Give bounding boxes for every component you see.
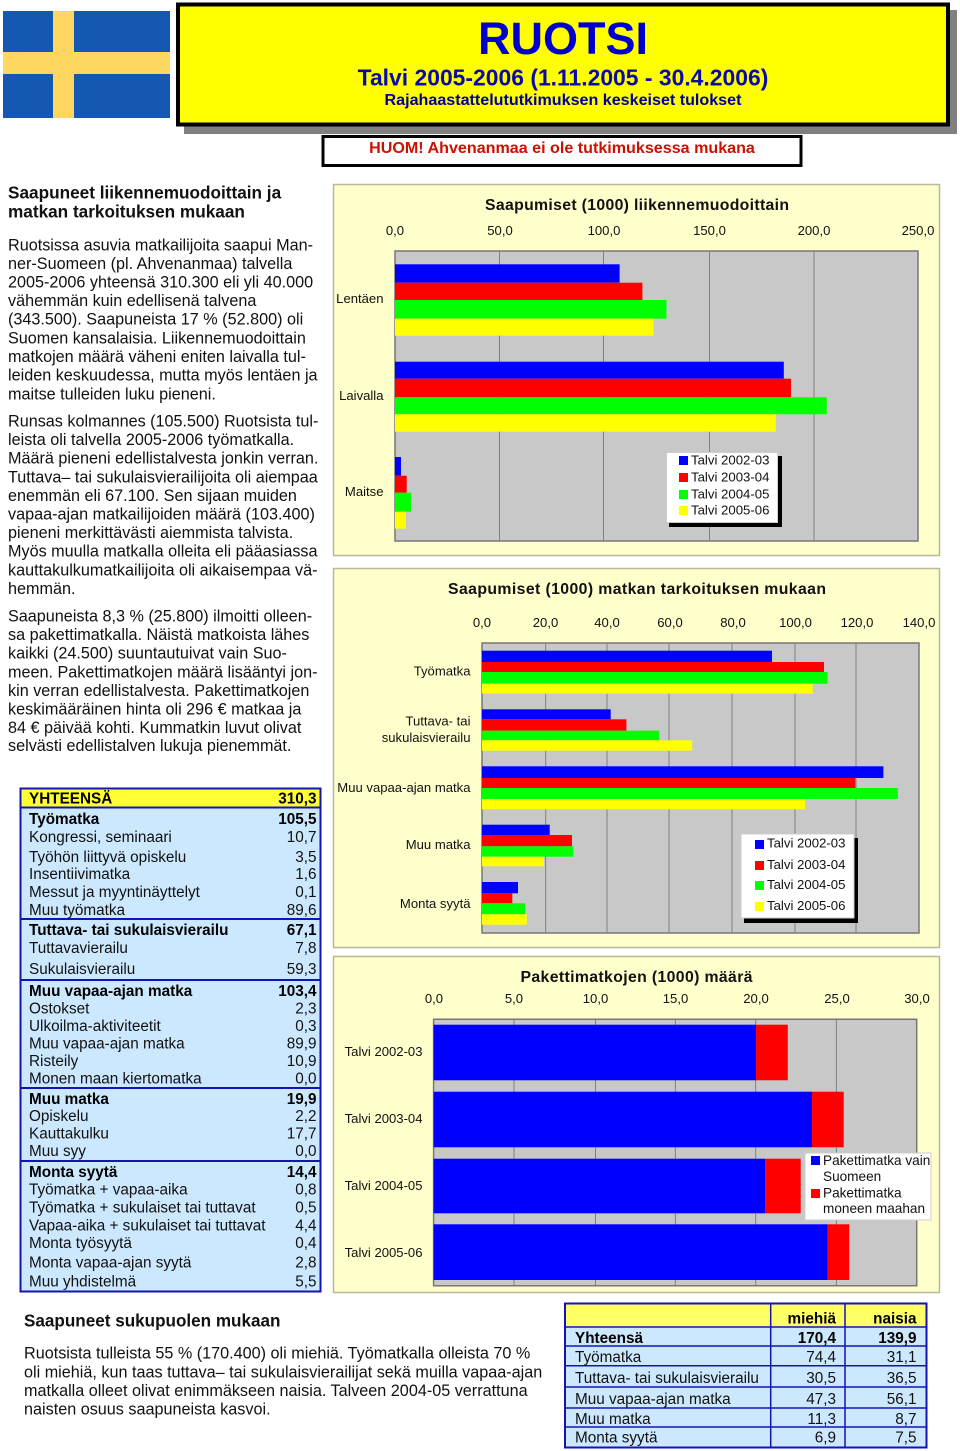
rows: Muu vapaa-ajan matka: 0,0 (295, 1070, 316, 1088)
panel: chart package tours (334, 956, 940, 1292)
legend: Pakettimatka vain (823, 1153, 930, 1168)
axis labels: 0,0 (425, 991, 443, 1006)
bars: Talvi 2005-06 (434, 1224, 849, 1280)
rows: totals (575, 1330, 916, 1347)
rows: YHTEENSÄ: YHTEENSÄ (29, 790, 112, 808)
text block: main article: leiden keskuudessa, mutta myös lentäen ja (8, 366, 318, 384)
legend: Talvi 2003-04 (691, 470, 769, 484)
rows: purposes (575, 1349, 916, 1446)
rows: purposes: 31,1 (887, 1349, 916, 1366)
rows: Muu matka: 19,9 (287, 1091, 316, 1108)
rows: Työmatka: 89,6 (287, 902, 316, 919)
header row (788, 1310, 917, 1328)
category labels (345, 1044, 422, 1260)
legend: Talvi 2004-05 (767, 877, 845, 892)
legend (666, 452, 782, 527)
rows: totals: 170,4 (798, 1330, 836, 1347)
rows: Työmatka: 1,6 (295, 866, 316, 883)
rows: Muu matka (29, 1091, 316, 1160)
rows: Työmatka: 0,1 (295, 884, 316, 901)
axis labels: 25,0 (824, 991, 850, 1006)
axis labels: 100,0 (779, 615, 812, 630)
text block: main article: (343.500). Saapuneista 17 % (52.800) oli (8, 310, 303, 328)
rows: Muu vapaa-ajan matka: 0,3 (295, 1018, 316, 1035)
text block: main article: maitse tulleiden luku pieneni. (8, 386, 216, 404)
rows: Työmatka: 3,5 (295, 849, 316, 866)
text block: gender article: naisten osuus saapuneista kasvoi. (24, 1400, 271, 1418)
axis labels (425, 991, 930, 1006)
rows: Muu vapaa-ajan matka: 2,3 (295, 1000, 316, 1018)
axis labels: 30,0 (904, 991, 930, 1006)
rows: Muu vapaa-ajan matka: Ostokset (29, 1000, 90, 1018)
bars: Tuttava- tai sukulaisvierailu (482, 709, 692, 751)
text block: main article: kin verran edellistalvesta. Pakettimatkojen (8, 682, 309, 700)
plot area (434, 1019, 917, 1286)
rows: Monta syytä: 0,5 (295, 1200, 316, 1216)
table: arrivals by purpose (20, 788, 321, 1292)
text block: main article: hemmän. (8, 580, 75, 598)
rows: purposes: 8,7 (895, 1411, 916, 1428)
rows: purposes: Muu vapaa-ajan matka (575, 1391, 731, 1408)
text block: main article: Myös muulla matkalla olleita eli pääasiassa (8, 542, 318, 560)
category labels: sukulaisvierailu (382, 730, 470, 745)
bars: Muu matka (482, 825, 573, 866)
legend: Talvi 2003-04 (767, 857, 845, 872)
text block: main article (8, 236, 318, 755)
rows: Monta syytä: Monta vapaa-ajan syytä (29, 1254, 192, 1272)
axis labels (386, 223, 934, 238)
rows: Monta syytä: Monta työsyytä (29, 1235, 132, 1252)
rows: totals: 139,9 (878, 1330, 916, 1347)
table: arrivals by gender (565, 1303, 927, 1448)
category labels: Talvi 2003-04 (345, 1111, 422, 1126)
rows: Monta syytä: 14,4 (287, 1164, 317, 1181)
rows: Monta syytä: 2,8 (295, 1254, 316, 1272)
rows: Muu matka: Muu matka (29, 1091, 109, 1108)
text block: gender article: matkalla olleet olivat enimmäkseen naisia. Talveen 2004-05 verrattuna (24, 1382, 528, 1400)
rows: Monta syytä: 5,5 (295, 1274, 316, 1290)
category labels: Laivalla (339, 388, 384, 403)
axis labels: 50,0 (487, 223, 513, 238)
rows: Tuttava- tai sukulaisvierailu: 59,3 (287, 961, 316, 978)
text block: main article: kauttakulkumatkailijoita oli aikaisempaa vä- (8, 562, 318, 580)
rows: Monta syytä: Muu yhdistelmä (29, 1274, 137, 1290)
bars: Lentäen (395, 264, 666, 336)
text block: gender article: Ruotsista tulleista 55 % (170.400) oli miehiä. Työmatkalla olleista 70 % (24, 1344, 530, 1362)
title: RUOTSI (478, 13, 648, 64)
axis labels: 120,0 (841, 615, 873, 630)
rows: Monta syytä: Monta syytä (29, 1164, 118, 1181)
rows: Muu vapaa-ajan matka: Ulkoilma-aktiviteetit (29, 1018, 162, 1035)
panel: chart arrivals by transport (334, 184, 940, 556)
axis labels: 40,0 (594, 615, 620, 630)
rows: purposes: Tuttava- tai sukulaisvierailu (575, 1370, 759, 1387)
rows: Tuttava- tai sukulaisvierailu (29, 922, 317, 978)
rows: purposes: Monta syytä (575, 1430, 658, 1446)
rows: Monta syytä: Työmatka + vapaa-aika (29, 1182, 188, 1198)
text block: main article: leista oli talvella 2005-2006 työmatkalla. (8, 431, 294, 449)
rows: Muu vapaa-ajan matka: Muu vapaa-ajan matka (29, 1036, 185, 1052)
text block: main article: Runsas kolmannes (105.500) Ruotsista tul- (8, 412, 318, 430)
icon: Swedish flag (3, 11, 170, 118)
text block: main article: enemmän eli 67.100. Sen sijaan muiden (8, 487, 297, 505)
chart title: Saapumiset (1000) liikennemuodoittain (485, 197, 789, 214)
heading: arrivals by transport and purpose (8, 182, 282, 222)
rows: Muu vapaa-ajan matka: 89,9 (287, 1036, 316, 1052)
note box: HUOM! Ahvenanmaa ei ole tutkimuksessa mukana (369, 139, 756, 157)
text block: main article: selvästi edellistalven lukuja pienemmät. (8, 737, 291, 755)
rows: Muu vapaa-ajan matka: 103,4 (278, 983, 317, 1000)
rows: Työmatka: Työmatka (29, 811, 100, 828)
chart title: Pakettimatkojen (1000) määrä (520, 969, 753, 986)
axis labels: 0,0 (473, 615, 491, 630)
rows: Muu matka: 2,2 (295, 1108, 316, 1125)
category labels: Talvi 2005-06 (345, 1245, 422, 1260)
rows: YHTEENSÄ (29, 790, 316, 808)
legend: Talvi 2004-05 (691, 486, 769, 502)
axis labels: 250,0 (902, 223, 934, 238)
text block: main article: ner-Suomeen (pl. Ahvenanmaa) talvella (8, 255, 292, 273)
legend: Pakettimatka (823, 1186, 902, 1200)
text block: main article: keskimääräinen hinta oli 296 € matkaa ja (8, 700, 301, 718)
text block: main article: vapaa-ajan matkailijoiden määrä (103.400) (8, 506, 315, 524)
category labels: Lentäen (336, 291, 384, 306)
rows: Monta syytä (29, 1164, 317, 1290)
heading: arrivals by transport and purpose: matkan tarkoituksen mukaan (8, 202, 245, 222)
rows: Monta syytä: 0,4 (295, 1235, 317, 1252)
rows: Monta syytä: 4,4 (295, 1218, 317, 1234)
heading: arrivals by transport and purpose: Saapuneet liikennemuodoittain ja (8, 182, 282, 202)
rows: Muu vapaa-ajan matka: Muu vapaa-ajan matka (29, 983, 193, 1000)
rows: Tuttava- tai sukulaisvierailu: Sukulaisvierailu (29, 961, 135, 978)
rows: Muu vapaa-ajan matka (29, 983, 317, 1088)
axis labels: 10,0 (583, 991, 608, 1006)
text block: main article: meen. Pakettimatkojen määrä lisääntyi jon- (8, 664, 318, 682)
bars: Muu vapaa-ajan matka (482, 766, 898, 809)
axis labels: 150,0 (693, 223, 726, 238)
rows: purposes: 47,3 (806, 1391, 836, 1408)
plot area (395, 251, 918, 541)
rows: Tuttava- tai sukulaisvierailu: 67,1 (287, 922, 317, 939)
rows: YHTEENSÄ: 310,3 (278, 790, 316, 808)
rows: Monta syytä: 0,8 (295, 1182, 316, 1198)
legend: Suomeen (823, 1169, 881, 1184)
rows: purposes: 7,5 (895, 1430, 916, 1446)
text block: main article: Ruotsissa asuvia matkailijoita saapui Man- (8, 236, 313, 254)
panel: chart arrivals by purpose (334, 568, 940, 948)
rows: purposes: 56,1 (887, 1391, 916, 1408)
text block: gender article: oli miehiä, kun taas tuttava– tai sukulaisvierailijat sekä muilla vapaa-ajan (24, 1364, 542, 1382)
text block: main article: matkojen määrä väheni eniten laivalla tul- (8, 348, 306, 366)
axis labels: 0,0 (386, 223, 404, 238)
bars: Talvi 2003-04 (434, 1092, 844, 1147)
rows: Työmatka: Insentiivimatka (29, 866, 131, 883)
axis labels: 60,0 (657, 615, 683, 630)
text block: main article: Tuttava– tai sukulaisvierailijoita oli aiempaa (8, 468, 318, 486)
category labels: Tuttava- tai (405, 714, 471, 728)
text block: main article: Saapuneista 8,3 % (25.800) ilmoitti olleen- (8, 608, 312, 626)
rows: Muu vapaa-ajan matka: 10,9 (287, 1053, 316, 1070)
text block: main article: kaikki (24.500) suuntautuivat vain Suo- (8, 644, 287, 662)
rows: Muu matka: 17,7 (287, 1126, 316, 1142)
axis labels: 15,0 (663, 991, 688, 1006)
text block: gender article (24, 1344, 542, 1418)
axis labels: 20,0 (743, 991, 769, 1006)
category labels: Muu matka (406, 837, 471, 852)
bars: Talvi 2004-05 (434, 1159, 801, 1213)
rows: Tuttava- tai sukulaisvierailu: Tuttavavierailu (29, 940, 128, 957)
rows: Monta syytä: Vapaa-aika + sukulaiset tai tuttavat (29, 1218, 266, 1234)
rows: purposes: 6,9 (815, 1430, 836, 1446)
category labels: Talvi 2004-05 (345, 1178, 422, 1193)
subtitle: period: Talvi 2005-2006 (1.11.2005 - 30.4.2006) (358, 64, 768, 90)
axis labels (473, 615, 935, 630)
bars: Laivalla (395, 362, 827, 432)
text block: main article: sa pakettimatkalla. Näistä matkoista lähes (8, 626, 309, 644)
axis labels: 200,0 (798, 223, 830, 238)
chart title: Saapumiset (1000) matkan tarkoituksen mukaan (448, 581, 826, 598)
rows: Työmatka (29, 811, 317, 919)
rows: Työmatka: Muu työmatka (29, 902, 126, 919)
bars: Maitse (395, 457, 411, 529)
subtitle: survey: Rajahaastattelututkimuksen keskeiset tulokset (385, 91, 742, 109)
rows: Muu vapaa-ajan matka: Risteily (29, 1053, 79, 1070)
rows: Työmatka: Työhön liittyvä opiskelu (29, 849, 186, 866)
bars: Monta syytä (482, 882, 527, 925)
bars: Työmatka (482, 651, 828, 694)
axis labels: 80,0 (720, 615, 746, 630)
rows: purposes: Työmatka (575, 1349, 642, 1366)
legend: moneen maahan (823, 1201, 925, 1216)
rows: Työmatka: 105,5 (278, 811, 317, 828)
rows: totals: Yhteensä (575, 1330, 644, 1347)
rows: Monta syytä: Työmatka + sukulaiset tai tuttavat (29, 1200, 256, 1216)
text block: main article: 84 € päivää kohti. Kummatkin luvut olivat (8, 719, 302, 737)
category labels: Muu vapaa-ajan matka (337, 780, 471, 795)
axis labels: 140,0 (903, 615, 935, 630)
title banner (178, 4, 957, 134)
category labels (336, 291, 384, 499)
legend: Talvi 2005-06 (691, 502, 769, 518)
heading: arrivals by gender: Saapuneet sukupuolen mukaan (24, 1312, 280, 1330)
bars: Talvi 2002-03 (434, 1025, 788, 1080)
rows: purposes: Muu matka (575, 1411, 651, 1428)
rows: Tuttava- tai sukulaisvierailu: Tuttava- tai sukulaisvierailu (29, 922, 228, 939)
category labels: Monta syytä (400, 896, 471, 911)
legend: Talvi 2002-03 (691, 452, 769, 468)
rows: purposes: 74,4 (806, 1349, 836, 1366)
text block: main article: 2005-2006 yhteensä 310.300 eli yli 40.000 (8, 274, 313, 292)
rows: Työmatka: 10,7 (287, 829, 316, 846)
legend (741, 834, 858, 923)
rows: Muu matka: Muu syy (29, 1143, 86, 1160)
rows: purposes: 36,5 (887, 1370, 916, 1387)
rows: Muu matka: 0,0 (295, 1143, 316, 1160)
rows: Työmatka: Messut ja myyntinäyttelyt (29, 884, 201, 901)
note box (323, 136, 801, 166)
rows: purposes: 11,3 (807, 1411, 836, 1428)
axis labels: 20,0 (533, 615, 558, 630)
rows: Muu vapaa-ajan matka: Monen maan kiertomatka (29, 1070, 202, 1088)
axis labels: 100,0 (588, 223, 620, 238)
rows: purposes: 30,5 (806, 1370, 836, 1387)
rows: Muu matka: Opiskelu (29, 1108, 89, 1125)
category labels: Maitse (345, 484, 384, 499)
text block: main article: pieneni merkittävästi aiemmista talvista. (8, 524, 293, 542)
text block: main article: Suomen kansalaisia. Liikennemuodoittain (8, 330, 306, 348)
text block: main article: vähemmän kuin edellisenä talvena (8, 292, 256, 310)
header row: naisia (873, 1310, 917, 1328)
category labels (337, 664, 471, 911)
legend: Talvi 2005-06 (767, 898, 845, 913)
legend (805, 1153, 931, 1220)
legend: Talvi 2002-03 (767, 836, 845, 850)
header row: miehiä (788, 1310, 836, 1328)
rows: Muu matka: Kauttakulku (29, 1126, 109, 1142)
plot area (482, 643, 919, 933)
rows: Työmatka: Kongressi, seminaari (29, 829, 172, 846)
text block: main article: Määrä pieneni edellistalvesta jonkin verran. (8, 450, 318, 468)
rows: Tuttava- tai sukulaisvierailu: 7,8 (295, 940, 316, 957)
axis labels: 5,0 (505, 991, 523, 1006)
category labels: Työmatka (414, 664, 471, 678)
category labels: Talvi 2002-03 (345, 1044, 422, 1059)
